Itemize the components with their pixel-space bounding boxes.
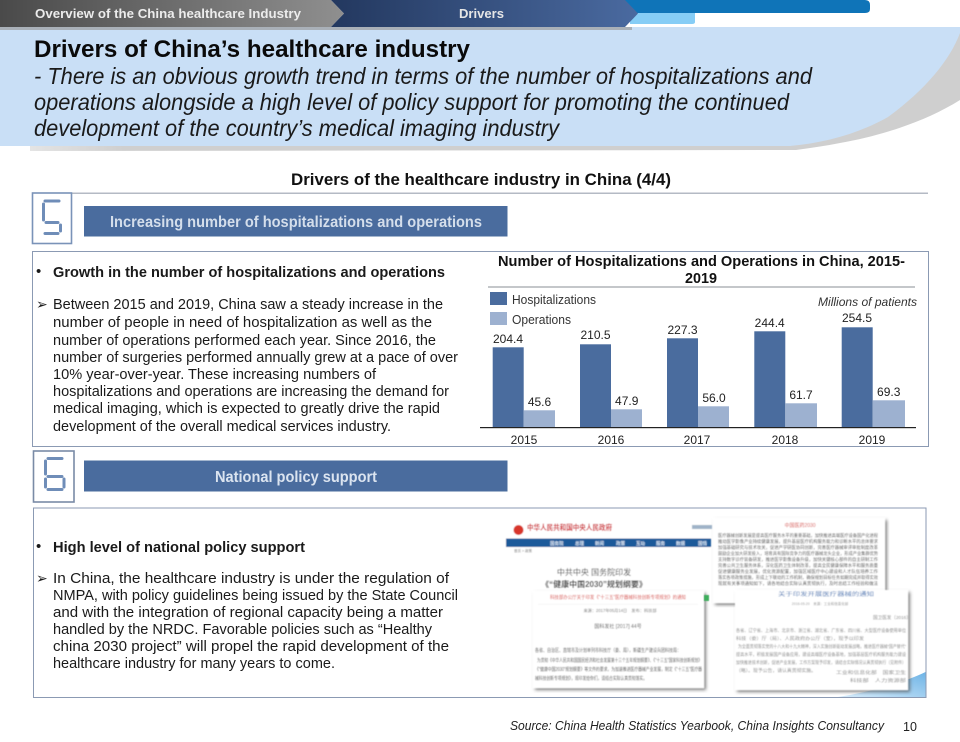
document: notice, right: 关于印发开展医疗器械的通知: [778, 590, 874, 598]
document: notice, front: 为贯彻《中华人民共和国国民经济和社会发展第十三个五年规划纲要》、《“十三五”国家科技创新规划》: [537, 657, 702, 664]
title: Drivers of China’s healthcare industry: [34, 36, 471, 63]
data labels: operations: 47.9: [615, 394, 639, 408]
document: government web page: 《“健康中国2030”规划纲要》: [541, 579, 647, 589]
section bar 5: Increasing number of hospitalizations and operations: [110, 214, 482, 231]
x axis years: 2016: [598, 433, 625, 447]
document: policy notice, back: 支持数字诊疗装备研发，推进医学影像设备升级，加快关键核心部件的自主研制工作: [718, 556, 878, 563]
document: notice, front: 械科技创新专项规划》，现印发给你们，请结合实际认真贯彻落实。: [535, 675, 647, 682]
page number: 10: [903, 720, 917, 734]
number badge 6: [34, 451, 74, 502]
document: policy notice, back: 医疗器械创新发展是提高医疗服务水平的重要基础，加快推进高端医疗设备国产化进程: [718, 532, 878, 539]
x axis years: [511, 433, 886, 447]
text block: hospitalizations: development of the overall medical services industry.: [53, 418, 391, 435]
document: government web page: 互动: [636, 540, 645, 547]
document: notice, front: 科技部办公厅关于印发《“十三五”医疗器械科技创新专项规划》的通知: [550, 594, 686, 601]
x axis years: 2017: [684, 433, 711, 447]
document: notice, right: [735, 590, 911, 690]
document: notice, right: 国卫医发〔2016〕: [873, 614, 911, 621]
text block: policy: [36, 538, 458, 672]
data labels: hospitalizations: [493, 311, 872, 346]
document: government web page: 国情: [698, 540, 707, 547]
section bar 5: [84, 206, 508, 236]
chart title: Number of Hospitalizations and Operations in China, 2015-: [498, 253, 905, 270]
document: notice, right: 为全面贯彻落实党的十八大和十九大精神，深入实施创新驱动发展战略，推进医疗器械“国产替代”: [738, 643, 906, 650]
text block: policy: In China, the healthcare industry is under the regulation of: [53, 570, 450, 587]
document: government web page: 中华人民共和国中央人民政府: [527, 523, 613, 532]
section heading: Drivers of the healthcare industry in China (4/4): [291, 171, 671, 189]
document: government web page: [505, 518, 712, 618]
text block: policy: healthcare industry for many years to come.: [53, 655, 335, 672]
data labels: hospitalizations: 244.4: [755, 316, 785, 330]
text block: policy: •: [36, 538, 41, 555]
decorative swoosh: [838, 672, 926, 697]
chart legend: Operations: [512, 313, 571, 327]
subtitle: - There is an obvious growth trend in terms of the number of hospitalizations and: [34, 63, 813, 89]
icon: green badge: [704, 595, 709, 601]
source note: Source: China Health Statistics Yearbook, China Insights Consultancy: [510, 719, 885, 733]
document: notice, right: （略）。现予公告，请认真贯彻实施。: [736, 667, 816, 674]
document: notice, right: 提高水平，积极发展国产设备应用，建设高端医疗设备基地，加强基层医疗机构服务能力建设: [736, 651, 906, 658]
document: government web page: 政策: [616, 540, 625, 547]
document: government web page: 服务: [656, 540, 665, 547]
text block: hospitalizations: number of operations performed each year. Since 2016, the: [53, 332, 436, 349]
unit label: Millions of patients: [818, 295, 917, 309]
number badge 5: [32, 193, 72, 244]
document: notice, front: 各省、自治区、直辖市及计划单列市科技厅（委、局），新疆生产建设兵团科技局：: [535, 647, 681, 654]
icon: national emblem: [514, 525, 524, 535]
document: policy notice, back: 现就有关事项通知如下，请各地结合实际认真贯彻执行，及时总结工作经验和做法: [718, 580, 878, 587]
text block: hospitalizations: number of surgeries performed annually grew at a pace of over: [53, 349, 458, 366]
text block: hospitalizations: number of people in need of hospitalization as well as the: [53, 314, 432, 331]
document: policy notice, back: [713, 518, 885, 603]
document: notice, right: 科技（委）厅（局）、人民政府办公厅（室），现予以印发: [736, 635, 864, 642]
document: policy notice, back: 促进健康服务业发展，优化资源配置，加强区域医疗中心建设和人才队伍培养工作: [718, 568, 878, 575]
document: government web page: 数据: [676, 540, 685, 547]
subtitle: operations alongside a high level of policy support for promoting the continued: [34, 89, 790, 115]
document: government web page: 总理: [575, 540, 584, 546]
document: notice, right: 2016-05-20 来源：工业和信息化部: [792, 601, 849, 606]
x axis years: 2019: [859, 433, 886, 447]
text block: policy: handled by the NRDC. Favorable policies such as “Healthy: [53, 621, 432, 638]
navigation bar: Overview of the China healthcare Industry: [35, 7, 301, 21]
document: policy notice, back: 中国医药2030: [784, 522, 816, 529]
chart legend: Hospitalizations: [512, 293, 596, 307]
text block: hospitalizations: Growth in the number of hospitalizations and operations: [53, 264, 445, 281]
text block: hospitalizations: Between 2015 and 2019, China saw a steady increase in the: [53, 296, 443, 313]
document: notice, front: 来源：2017年05月14日 发布：科技部: [583, 607, 657, 614]
chart title: 2019: [685, 270, 717, 287]
data labels: operations: [528, 385, 901, 409]
text block: hospitalizations: hospitalizations and operations are increasing the demand for: [53, 383, 449, 400]
document: government web page: 首页 > 政策: [514, 548, 532, 553]
text block: policy: ➢: [36, 571, 48, 587]
bars: hospitalizations: [493, 327, 873, 427]
document: policy notice, back: 落实各项政策措施，形成上下联动的工作机制，确保规划目标任务如期完成并取得实效: [718, 574, 878, 581]
section bar 6: National policy support: [215, 469, 377, 486]
panel: hospitalizations: [32, 252, 928, 447]
text block: hospitalizations: medical imaging, which is expected to greatly drive the rapid: [53, 400, 440, 417]
document: notice, front: 《“健康中国2030”规划纲要》等文件的要求，为加速推进医疗器械产业发展，制定《“十三五”医疗器: [535, 666, 702, 673]
chart legend: [490, 292, 596, 327]
x axis years: 2018: [772, 433, 799, 447]
document: policy notice, back: 鼓励企业加大研发投入，培育具有国际竞争力的医疗器械龙头企业，形成产业集群优势: [718, 550, 878, 557]
data labels: hospitalizations: 204.4: [493, 332, 523, 346]
x axis years: 2015: [511, 433, 538, 447]
data labels: operations: 61.7: [789, 388, 813, 402]
document: government web page: 中共中央 国务院印发: [557, 567, 631, 577]
subtitle: [34, 63, 813, 141]
document: notice, right: 各省、辽宁省、上海市、北京市、浙江省、湖北省、广东省、四川省、大型医疗设备使用单位: [736, 627, 906, 634]
document: policy notice, back: 完善公共卫生服务体系，深化医药卫生体制改革，提高全民健康保障水平和服务质量: [718, 562, 878, 569]
document: government web page: 国务院: [550, 540, 564, 547]
panel: national policy: [34, 508, 926, 698]
header background panel: [0, 27, 960, 151]
section bar 6: [84, 460, 508, 492]
text block: hospitalizations: [36, 263, 458, 435]
text block: policy: High level of national policy support: [53, 539, 305, 556]
data labels: operations: 56.0: [702, 391, 726, 405]
text block: policy: NMPA, with policy guidelines being issued by the State Council: [53, 587, 458, 604]
text block: hospitalizations: ➢: [36, 297, 48, 313]
document: notice, right: 科技部 人力资源部: [850, 677, 907, 684]
text block: policy: china 2030 project” will propel the rapid development of the: [53, 638, 449, 655]
data labels: hospitalizations: 210.5: [580, 328, 611, 342]
chart title: [498, 253, 905, 287]
data labels: hospitalizations: 254.5: [842, 311, 872, 325]
navigation bar: [0, 0, 870, 30]
data labels: operations: 69.3: [877, 385, 901, 399]
subtitle: development of the country’s medical imaging industry: [34, 115, 560, 141]
document: policy notice, back: 推动医学影像产业持续健康发展，提升基层医疗机构服务能力和诊断水平的总体要求: [718, 538, 878, 545]
document: notice, front: [533, 591, 704, 688]
document: notice, right: 工业和信息化部 国家卫生: [836, 669, 906, 676]
data labels: operations: 45.6: [528, 395, 552, 409]
text block: hospitalizations: 10% year-over-year. These increasing numbers of: [53, 366, 377, 383]
document: policy notice, back: 加强基础研究与技术攻关，促进产学研医协同创新，完善医疗器械审评审批制度改革: [718, 544, 878, 551]
document: notice, right: 加快推进技术创新，促进产业发展，工作方案现予印发，请结合实际情况认真贯彻执行（见附件）: [736, 659, 906, 666]
text block: policy: and with the integration of regional capacity being a matter: [53, 604, 443, 621]
document: government web page: 新闻: [595, 540, 604, 547]
data labels: hospitalizations: 227.3: [667, 323, 698, 337]
document: notice, front: 国科发社 [2017] 44号: [594, 623, 642, 630]
bars: operations: [524, 400, 905, 427]
text block: hospitalizations: •: [36, 263, 41, 280]
bar chart: [480, 253, 917, 447]
navigation bar: Drivers: [459, 7, 504, 21]
